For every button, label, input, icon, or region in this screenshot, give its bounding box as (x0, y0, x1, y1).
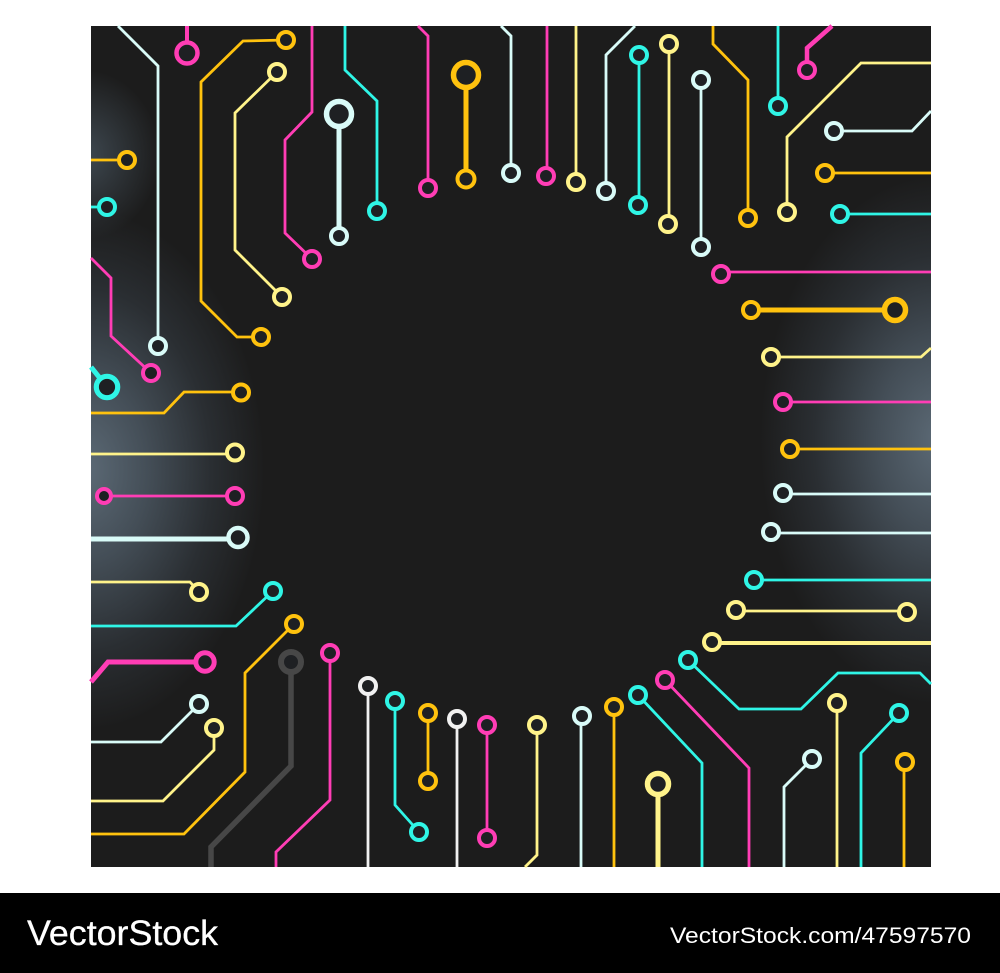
top-left pale cyan trace (118, 26, 166, 354)
top pink node (176, 26, 198, 64)
orange trace (817, 165, 931, 181)
pale yellow trace (91, 720, 222, 801)
orange trace (420, 705, 436, 789)
cyan trace (832, 206, 931, 222)
brand name: VectorStock (27, 913, 218, 953)
pink trace (276, 645, 338, 867)
pale cyan thick trace (91, 528, 248, 547)
pink trace (97, 488, 243, 504)
cyan trace (630, 687, 702, 867)
pale cyan trace (826, 111, 931, 139)
pink trace (775, 394, 931, 410)
pale yellow trace (728, 602, 915, 620)
pale yellow trace (660, 36, 677, 232)
pink trace (285, 26, 320, 267)
pale cyan trace (775, 485, 931, 501)
cyan trace (680, 652, 931, 709)
cyan trace (91, 583, 281, 626)
pale cyan trace (693, 72, 709, 255)
orange trace (897, 754, 913, 867)
orange trace (782, 441, 931, 457)
pale yellow thick trace (648, 774, 668, 867)
cyan stub (91, 199, 115, 215)
pink thick trace (91, 653, 214, 682)
pale yellow trace (829, 695, 845, 867)
cyan trace (770, 26, 786, 114)
image URL: VectorStock.com/47597570 (670, 923, 971, 948)
orange thick trace (454, 62, 478, 188)
orange trace (91, 616, 302, 834)
cyan trace (387, 693, 427, 840)
cyan trace (630, 47, 647, 213)
pink trace (799, 26, 832, 78)
white trace (360, 678, 376, 867)
cyan thick node (91, 367, 118, 398)
cyan trace (861, 705, 907, 867)
pale cyan trace (501, 26, 519, 181)
orange thick trace (743, 300, 906, 320)
pale cyan trace (598, 26, 635, 199)
orange trace (91, 384, 249, 413)
orange trace (201, 32, 294, 345)
pink trace (479, 717, 495, 846)
pale cyan trace (574, 708, 590, 867)
pale yellow trace (568, 26, 584, 190)
orange trace (713, 26, 756, 226)
pale yellow thick trace (704, 634, 931, 650)
orange stub (91, 152, 135, 168)
pink trace (91, 258, 159, 381)
footer bar (0, 893, 1000, 973)
pale cyan trace (784, 751, 820, 867)
pink trace (713, 266, 931, 282)
pale yellow trace (525, 717, 545, 867)
pink trace (657, 672, 749, 867)
cyan trace (746, 572, 931, 588)
circuit board panel (91, 26, 931, 867)
pale yellow trace (763, 348, 931, 365)
pink trace (418, 26, 436, 196)
white trace (449, 711, 465, 867)
orange trace (606, 699, 622, 867)
cyan trace (345, 26, 385, 219)
pale yellow trace (91, 444, 243, 460)
grey thick trace (211, 652, 301, 867)
pale cyan trace (91, 696, 207, 742)
pale yellow trace (91, 582, 207, 600)
pale yellow trace (779, 63, 931, 220)
pale cyan trace (763, 524, 931, 540)
pale cyan thick trace (326, 102, 352, 244)
pale yellow trace (235, 64, 290, 305)
pink trace (538, 26, 554, 184)
